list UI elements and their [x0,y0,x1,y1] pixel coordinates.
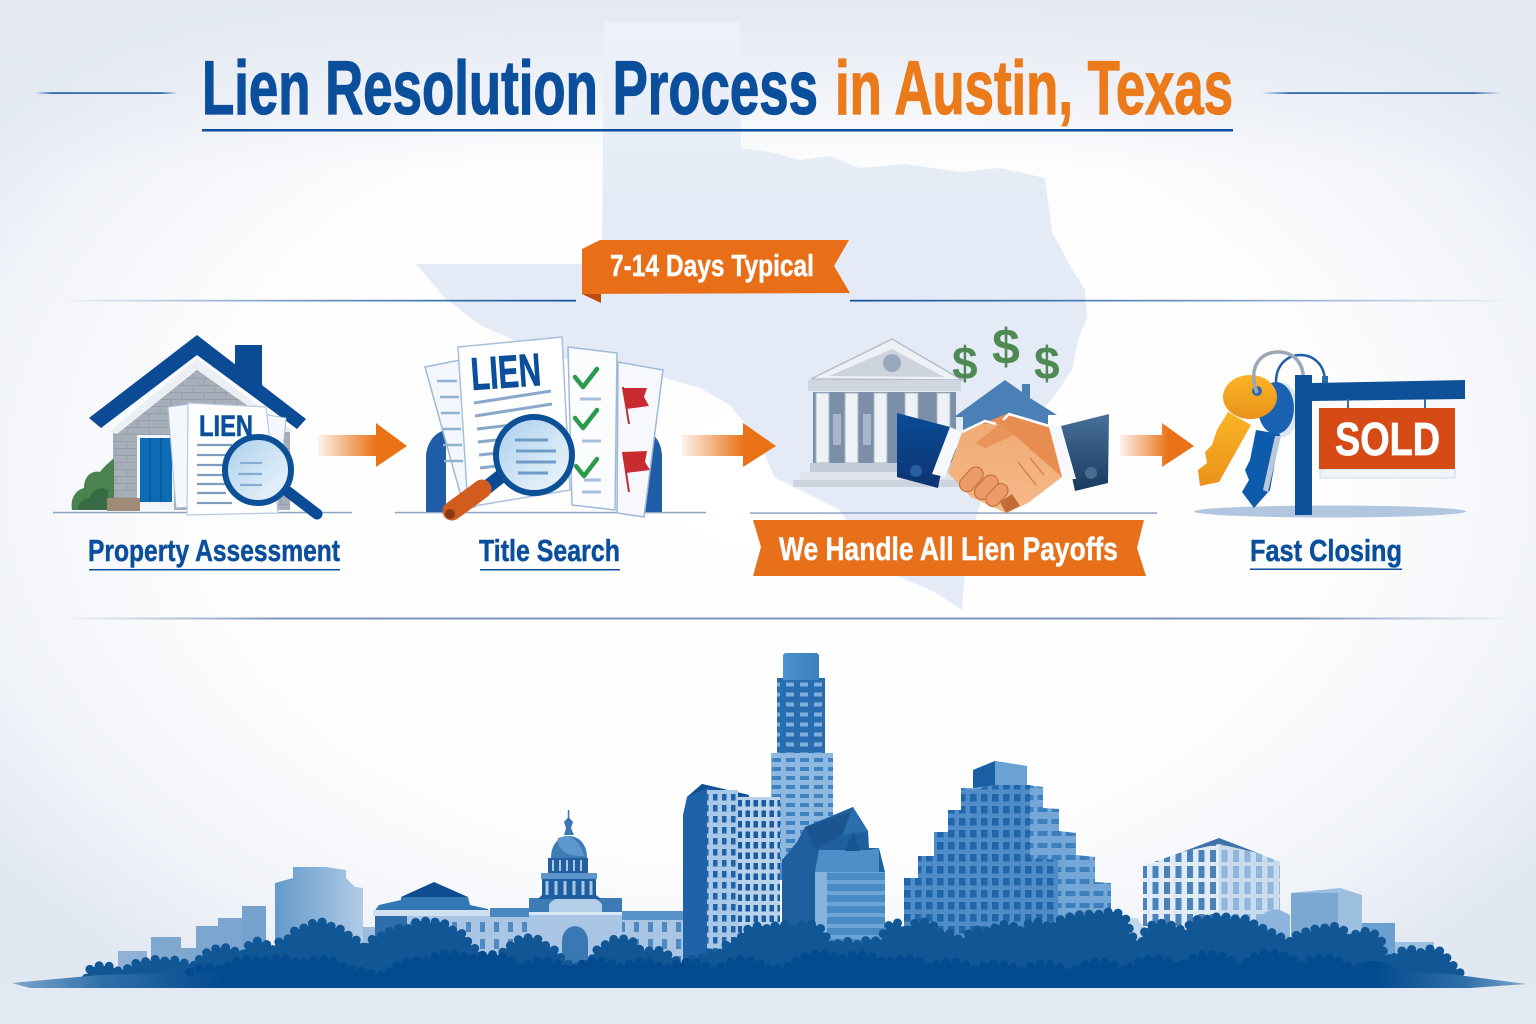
step 1: property assessment [53,335,352,515]
title [35,46,1501,132]
icon: dollar signs: $ [1034,337,1060,389]
icon: green checks [575,369,597,476]
icon: sold sign: SOLD [1335,413,1440,465]
arrow 3 [1120,423,1194,467]
icon: stacked papers: LIEN [469,343,543,400]
label: fast closing: Fast Closing [1250,533,1402,568]
icon: lien documents: LIEN [199,410,253,443]
lower divider [60,618,1515,620]
ground line [750,512,1157,514]
label: title search: Title Search [479,533,620,568]
title right rule [1261,92,1501,94]
capitol connector [490,908,529,965]
capitol drum [538,810,601,899]
capitol right wing [622,911,684,965]
capitol left wing [373,882,490,965]
peaked dark building [782,807,885,946]
icon: dollar signs [952,319,1060,389]
upper divider right [850,300,1515,302]
banner: we handle all lien payoffs: We Handle All Lien Payoffs [779,531,1118,567]
far left buildings [118,867,377,973]
capitol building [373,810,684,967]
step 2: title search [395,337,706,519]
banner: we handle all lien payoffs [753,520,1146,576]
ribbon: 7-14 days typical: 7-14 Days Typical [610,248,814,283]
stepped pyramid tower [904,761,1111,960]
office building right [1143,838,1280,935]
ground line [53,512,352,513]
label: property assessment: Property Assessment [88,533,340,568]
frost tower [771,653,833,880]
Austin skyline [12,653,1526,988]
icon: dollar signs: $ [952,337,978,389]
upper divider left [60,300,576,302]
Texas map silhouette [416,22,1087,610]
tree line lower [12,953,1526,988]
icon: bank [793,339,963,487]
icon: magnifier with orange handle [445,417,572,519]
icon: dollar signs: $ [992,319,1020,375]
tree line [12,912,1526,988]
arrow 1 [318,423,407,467]
sign shadow [1194,506,1466,518]
title underline [202,129,1233,132]
title left rule [35,92,178,94]
icon: house [72,335,306,511]
ground line [395,512,706,513]
icon: lien documents [168,403,286,515]
light building behind trees [1112,918,1152,950]
icon: magnifier [225,437,317,514]
tree line lower scallops [190,953,1350,976]
icon: handshake [897,413,1109,513]
far right buildings [1258,888,1434,962]
icon: stacked papers [425,337,663,517]
icon: small house [954,380,1057,432]
title text blue: Lien Resolution Process [202,46,818,131]
curved residential tower [683,784,780,965]
arrow 2 [682,423,776,467]
icon: sold sign [1295,375,1465,515]
capitol center [529,896,622,967]
tree line upper [84,912,1464,988]
icon: red flags [622,387,650,492]
icon: folder back [426,430,662,512]
step 4: fast closing [1194,352,1466,518]
icon: keys [1198,352,1325,508]
ground band [0,988,1536,1024]
title text orange: in Austin, Texas [835,46,1233,131]
top background tint [0,0,1536,170]
ribbon: 7-14 days typical [582,240,850,303]
step 3: lien payoffs [750,319,1157,514]
